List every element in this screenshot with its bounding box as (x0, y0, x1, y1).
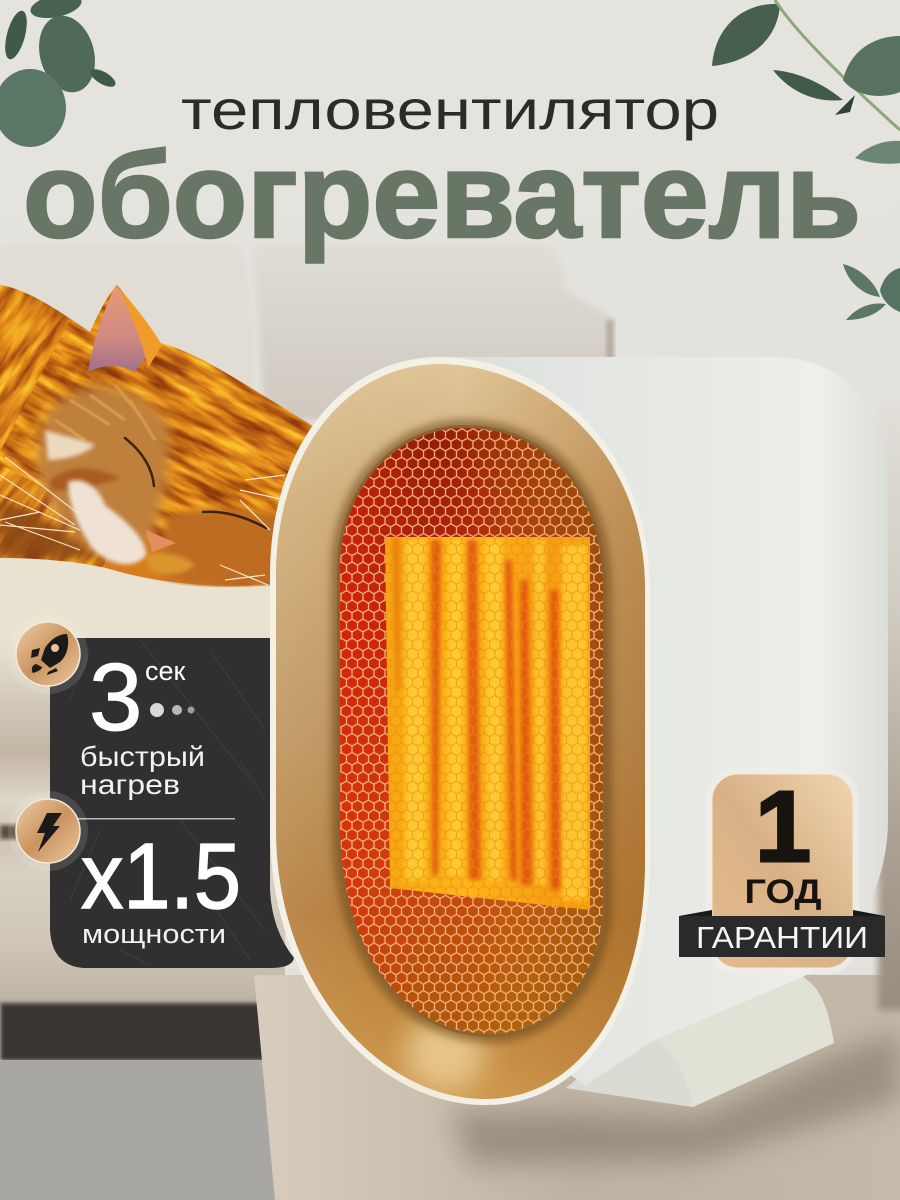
ribbon text: ГАРАНТИИ (696, 920, 868, 955)
stat: 3 seconds (89, 644, 194, 751)
warranty badge (679, 768, 885, 974)
dark features panel (8, 614, 294, 968)
stat: x1.5 power: x1.5 (81, 824, 241, 928)
cat closed eyes (125, 438, 266, 528)
cat ear (88, 286, 160, 372)
heater inner bezel (337, 425, 606, 1037)
heater stand base (566, 977, 834, 1107)
stat: 3 seconds: 3 (89, 644, 142, 751)
caption: fast heating: нагрев (80, 769, 180, 800)
badge number: 1 (755, 771, 811, 883)
heating element (385, 537, 590, 910)
ribbon folds (679, 910, 885, 916)
heater front ring white rim (270, 357, 650, 1105)
badge year label: ГОД (744, 873, 822, 911)
heater body shell (430, 357, 888, 1085)
heater (270, 357, 888, 1107)
cat white cheek (45, 430, 95, 460)
cat face tan (38, 387, 169, 559)
badge gold card (712, 774, 853, 968)
cat forehead stripe (50, 468, 120, 490)
heating element red slats (392, 537, 560, 890)
title: main heading: обогреватель (23, 127, 861, 263)
coin icon: rocket (8, 614, 88, 694)
cat body and head (0, 285, 320, 600)
background: blurred sofa (0, 245, 900, 1200)
stat: 3 seconds: сек (145, 656, 186, 686)
decorative leaves top left (0, 0, 118, 147)
heater gold ring (276, 364, 645, 1099)
cream seat cushion under cat front (0, 558, 290, 640)
heater glowing grille (336, 424, 608, 1040)
badge halo (706, 768, 859, 974)
grille mesh (336, 424, 608, 1040)
decorative leaves top right (712, 0, 900, 164)
cat whiskers (0, 457, 285, 585)
caption: fast heating: быстрый (80, 741, 205, 772)
ring highlight bottom (405, 1014, 485, 1090)
decorative leaves right (843, 264, 900, 320)
cat muzzle white (68, 480, 146, 564)
caption: fast heating (80, 741, 205, 800)
cat chin (146, 553, 195, 575)
heating element bright streaks (405, 540, 587, 900)
title: product type: тепловентилятор (181, 78, 719, 141)
cat ear rim (116, 285, 162, 368)
panel texture (70, 640, 265, 965)
panel background (50, 638, 294, 968)
cat right cheek (160, 509, 290, 588)
sleeping ginger cat (0, 285, 313, 588)
ring side shade (276, 364, 645, 1099)
cat lower dark fur (0, 500, 100, 559)
cat nose (146, 530, 176, 552)
caption: power: мощности (82, 919, 226, 949)
cat fur texture (0, 285, 312, 586)
element mesh (385, 537, 590, 910)
coin icon: lightning (8, 791, 88, 871)
cavity edge shade (340, 428, 603, 1034)
ribbon (679, 916, 885, 957)
cat forehead streaks (55, 385, 155, 440)
